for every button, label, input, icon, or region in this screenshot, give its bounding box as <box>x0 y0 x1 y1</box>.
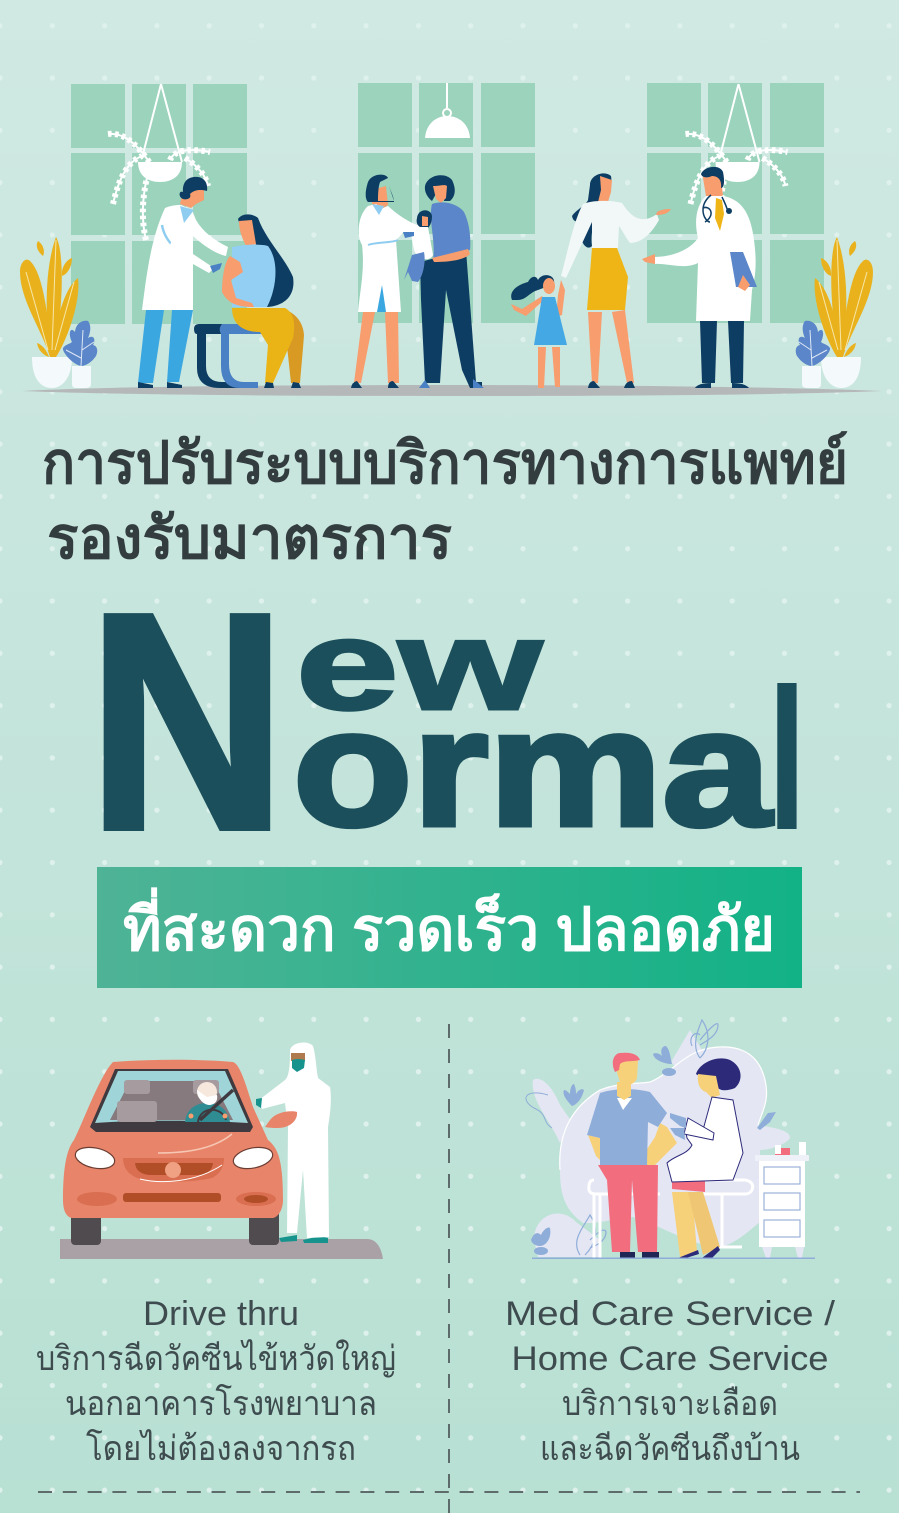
text: med care service: บริการเจาะเลือด <box>562 1385 778 1423</box>
window left <box>71 84 247 324</box>
text: drive thru: นอกอาคารโรงพยาบาล <box>65 1384 377 1423</box>
woman with skirt <box>561 173 671 388</box>
dashed dividers <box>448 1024 450 1513</box>
patient seated <box>222 214 304 388</box>
heading: New Normal: l <box>770 650 804 869</box>
chair <box>589 1180 753 1258</box>
illustration: drive thru <box>60 1043 383 1259</box>
leaves <box>531 1046 776 1255</box>
driver <box>185 1082 233 1122</box>
ground line <box>532 1258 815 1259</box>
doctor with clipboard <box>642 167 757 388</box>
heading: New Normal: N <box>88 550 286 894</box>
window centre <box>358 83 535 323</box>
text: drive thru <box>36 1295 396 1468</box>
banner: ที่สะดวก รวดเร็ว ปลอดภัย <box>123 887 775 963</box>
road <box>60 1239 383 1259</box>
text: drive thru: บริการฉีดวัคซีนไข้หวัดใหญ่ <box>36 1339 396 1378</box>
background shapes <box>533 1030 790 1257</box>
title: การปรับระบบบริการทางการแพทย์ <box>42 430 848 496</box>
heading: New Normal <box>88 550 804 894</box>
blob outline <box>560 1047 767 1170</box>
windshield <box>90 1069 253 1132</box>
illustration: medical staff and patients <box>20 83 882 396</box>
bumper <box>123 1193 221 1202</box>
icon: potted plant right <box>796 237 873 388</box>
stool <box>194 324 271 388</box>
man patient <box>587 1053 677 1258</box>
heading: New Normal: ew <box>296 594 543 737</box>
title: รองรับมาตรการ <box>47 506 452 571</box>
mother holding child <box>403 175 484 388</box>
side mirror <box>265 1111 297 1128</box>
doctor giving injection <box>138 177 228 388</box>
text: med care service: Med Care Service / <box>505 1295 836 1333</box>
icon: ceiling lamp <box>425 83 470 138</box>
nurse vaccinating child <box>351 175 420 388</box>
illustration: home care <box>526 1020 815 1259</box>
ground shadow <box>22 385 882 396</box>
nurse <box>667 1058 743 1258</box>
wheels <box>71 1210 279 1245</box>
text: drive thru: โดยไม่ต้องลงจากรถ <box>86 1429 356 1468</box>
icon: hanging plant right <box>686 84 788 240</box>
icon: hanging plant left <box>108 84 210 240</box>
icon: potted plant left <box>20 237 97 388</box>
text: med care service: Home Care Service <box>512 1340 828 1378</box>
headlights <box>73 1144 275 1172</box>
heading: New Normal: orma <box>293 676 773 861</box>
title <box>42 430 848 571</box>
text: med care service <box>505 1295 836 1468</box>
text: med care service: และฉีดวัคซีนถึงบ้าน <box>540 1430 800 1468</box>
little girl <box>511 275 567 388</box>
grille <box>123 1158 224 1182</box>
banner <box>97 867 802 988</box>
text: drive thru: Drive thru <box>143 1295 299 1333</box>
medical cabinet <box>755 1142 809 1258</box>
protective suit worker <box>256 1043 331 1243</box>
window right <box>647 83 824 323</box>
car body <box>63 1060 283 1218</box>
